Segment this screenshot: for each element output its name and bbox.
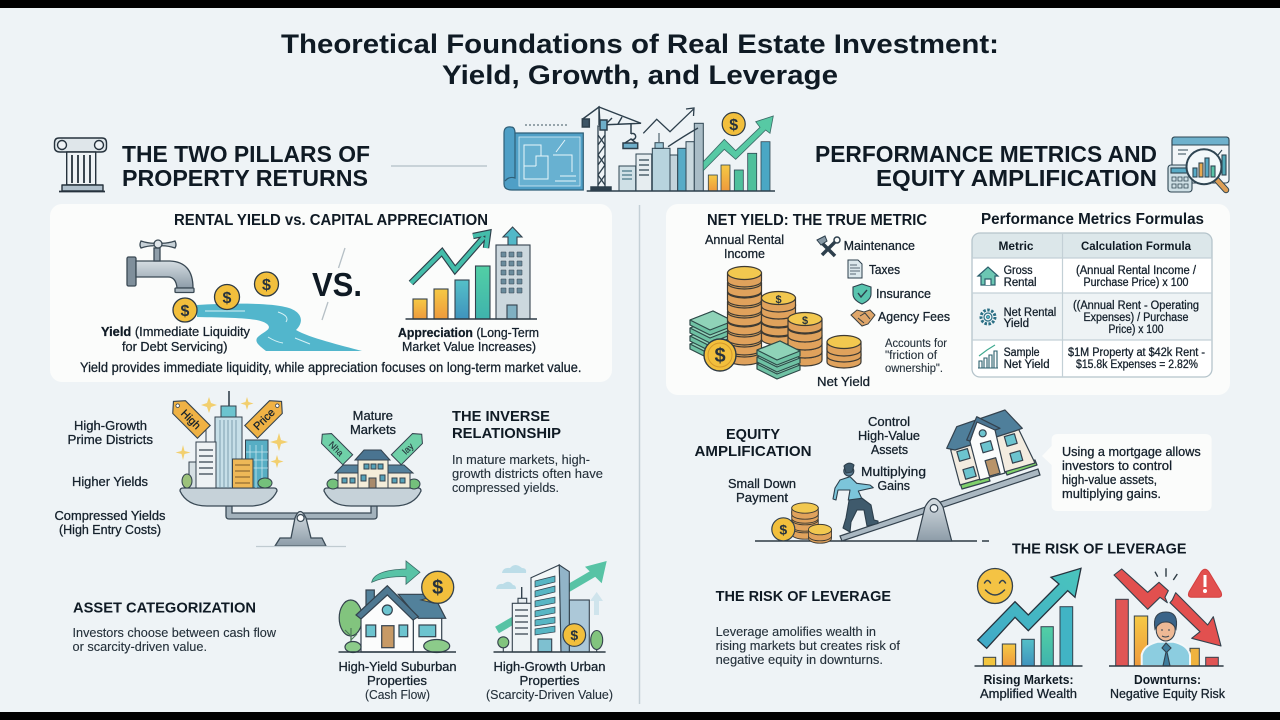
label: control high-value assets: Assets bbox=[871, 443, 908, 457]
label: suburban: Properties bbox=[367, 674, 427, 688]
labels: left of scale bbox=[54, 419, 166, 537]
row: sample net yield: Net Yield bbox=[1004, 359, 1050, 371]
label: multiplying gains bbox=[861, 465, 926, 493]
icon: gear bbox=[981, 310, 995, 324]
note: friction of ownership bbox=[885, 338, 947, 375]
icons: sparkles bbox=[176, 397, 288, 468]
row: sample net yield bbox=[978, 345, 1205, 371]
section: equity amplification bbox=[694, 410, 1212, 543]
icon: curved arrow bbox=[372, 561, 420, 584]
icon: third coin stack: $ bbox=[802, 315, 808, 327]
icon: price tag price bbox=[245, 395, 288, 438]
row: sample net yield: $15.8k Expenses = 2.82% bbox=[1076, 359, 1198, 371]
label: small down payment bbox=[728, 477, 796, 505]
callout: mortgage: Using a mortgage allows bbox=[1062, 445, 1201, 459]
heading: asset categorization: ASSET CATEGORIZATION bbox=[73, 600, 256, 616]
icon: city buildings bbox=[619, 123, 703, 191]
icon: urban coin: $ bbox=[570, 627, 578, 643]
icon: smiley bbox=[978, 568, 1012, 604]
panel: rental yield vs capital appreciation bbox=[50, 204, 612, 382]
label: appreciation bbox=[398, 325, 539, 354]
labels: left of scale: Compressed Yields bbox=[54, 509, 166, 523]
row: gross rental bbox=[978, 265, 1197, 289]
icon: green tag right: lay bbox=[400, 441, 416, 456]
icon: medium coin stack bbox=[762, 292, 796, 345]
section: risk of leverage charts bbox=[974, 540, 1226, 701]
icon: river stream bbox=[197, 304, 362, 351]
label: rising markets: Rising Markets: bbox=[984, 673, 1074, 687]
label: downturns: Negative Equity Risk bbox=[1110, 687, 1226, 701]
heading: two pillars: PROPERTY RETURNS bbox=[122, 165, 368, 191]
text: asset categorization body: or scarcity-driven value. bbox=[72, 640, 207, 654]
table header: Metric bbox=[998, 239, 1034, 253]
chart: downturn bars bbox=[1116, 599, 1218, 666]
icon: third coin stack bbox=[788, 312, 822, 366]
label: mature markets: Mature bbox=[353, 409, 393, 423]
label: rising markets: Amplified Wealth bbox=[980, 687, 1077, 701]
cost: agency fees: Agency Fees bbox=[878, 310, 950, 324]
panel: net yield and formulas bbox=[666, 204, 1230, 395]
label: suburban bbox=[338, 660, 457, 702]
icon: small chart bbox=[978, 345, 998, 368]
icon: tall coin stack bbox=[728, 266, 762, 365]
text: risk body: rising markets but creates risk of bbox=[716, 639, 901, 653]
text: risk body bbox=[716, 625, 901, 667]
icon: price tag price: Price bbox=[251, 407, 278, 433]
row: net rental yield: Yield bbox=[1004, 318, 1029, 330]
label: appreciation: Appreciation (Long-Term bbox=[398, 325, 539, 340]
row: gross rental: Purchase Price) x 100 bbox=[1084, 277, 1188, 289]
icon: coin bubble bbox=[421, 571, 454, 603]
label: urban: Properties bbox=[520, 674, 580, 688]
icon: tilted house bbox=[947, 410, 1037, 489]
title: Theoretical Foundations of Real Estate Investment: bbox=[281, 29, 999, 59]
text: asset categorization body: Investors choose between cash flow bbox=[72, 626, 277, 640]
callout: mortgage: multiplying gains. bbox=[1062, 487, 1161, 501]
icon: green tag left: Nha bbox=[327, 439, 345, 458]
note: friction of ownership: ownership". bbox=[885, 363, 943, 375]
row: gross rental: Rental bbox=[1004, 277, 1037, 289]
icon: seesaw bbox=[755, 469, 1040, 541]
label: yield: Yield (Immediate Liquidity bbox=[101, 324, 250, 339]
label: net yield: Net Yield bbox=[817, 375, 870, 389]
heading: inverse relationship bbox=[452, 408, 561, 442]
label: small down payment: Small Down bbox=[728, 477, 796, 491]
text: risk body: Leverage amolifies wealth in bbox=[716, 625, 876, 639]
cost: taxes: Taxes bbox=[869, 263, 900, 277]
icon: tax document bbox=[848, 260, 862, 278]
text: inverse relationship body bbox=[452, 453, 603, 495]
icon: cash stack front bbox=[757, 341, 800, 379]
icon: appreciation arrow bbox=[411, 233, 488, 283]
heading: risk of leverage upper: THE RISK OF LEVERAGE bbox=[1012, 540, 1186, 558]
icon: coin 2 bbox=[214, 284, 240, 310]
section: inverse relationship bbox=[54, 391, 603, 546]
heading: inverse relationship: RELATIONSHIP bbox=[452, 425, 561, 442]
row: net rental yield: Expenses) / Purchase bbox=[1084, 312, 1188, 324]
icon: tools bbox=[817, 236, 840, 256]
text: asset categorization body bbox=[72, 626, 277, 654]
icon: clouds and faint up arrow bbox=[496, 565, 603, 615]
heading: performance metrics: EQUITY AMPLIFICATION bbox=[876, 165, 1157, 191]
callout: mortgage: investors to control bbox=[1062, 459, 1172, 473]
icon: dollar coin bbox=[722, 112, 745, 136]
label: downturns bbox=[1110, 673, 1226, 701]
label: urban: High-Growth Urban bbox=[494, 660, 606, 674]
icon: worried investor bbox=[1142, 612, 1190, 666]
icon: mansion on scale bbox=[327, 450, 420, 489]
row: net rental yield bbox=[981, 300, 1199, 336]
heading: risk of leverage lower: THE RISK OF LEVERAGE bbox=[716, 588, 891, 605]
icon: dashboard with calculator and magnifier bbox=[1168, 137, 1229, 192]
icon: urban arrow bbox=[497, 561, 607, 630]
icon: suburban house bbox=[339, 586, 450, 652]
icon: handshake bbox=[851, 310, 875, 326]
label: multiplying gains: Gains bbox=[878, 479, 910, 493]
icon: rising arrow bbox=[978, 568, 1081, 648]
cost: maintenance: Maintenance bbox=[844, 239, 915, 253]
section: risk of leverage text bbox=[716, 588, 901, 667]
callout: mortgage: high-value assets, bbox=[1062, 473, 1157, 487]
heading: performance metrics: PERFORMANCE METRICS AND bbox=[815, 141, 1157, 167]
label: urban bbox=[486, 660, 613, 702]
label: annual rental income bbox=[705, 233, 784, 261]
note: friction of ownership: Accounts for bbox=[885, 338, 947, 350]
icon: growth arrow bbox=[703, 116, 773, 171]
icon: thin trend arrows bbox=[643, 108, 698, 147]
heading: rental yield vs appreciation: RENTAL YIELD vs. CAPITAL APPRECIATION bbox=[174, 212, 488, 229]
icon: house bbox=[978, 267, 998, 285]
summary text: Yield provides immediate liquidity, while appreciation focuses on long-term market value. bbox=[80, 360, 582, 375]
label: annual rental income: Annual Rental bbox=[705, 233, 784, 247]
heading: equity amplification: EQUITY bbox=[726, 426, 780, 443]
icon: faucet bbox=[127, 240, 194, 292]
labels: left of scale: (High Entry Costs) bbox=[59, 523, 161, 537]
icon: coin bubble: $ bbox=[432, 577, 443, 599]
row: sample net yield: $1M Property at $42k Rent - bbox=[1068, 347, 1205, 359]
illustration: blueprint, crane, buildings and growth chart bbox=[504, 107, 775, 191]
icon: price tag high: High bbox=[178, 408, 203, 432]
icon: down payment coins: $ bbox=[779, 521, 787, 537]
label: yield: for Debt Servicing) bbox=[122, 339, 228, 354]
icon: small coin stack bbox=[827, 336, 861, 368]
icon: crane bbox=[582, 107, 641, 190]
row: gross rental: Gross bbox=[1004, 265, 1033, 277]
row: gross rental: (Annual Rental Income / bbox=[1076, 265, 1197, 277]
label: small down payment: Payment bbox=[736, 491, 789, 505]
icon: green tag right bbox=[391, 429, 427, 465]
label: mature markets bbox=[350, 409, 396, 437]
icon: urban coin bbox=[563, 624, 586, 646]
label: suburban: High-Yield Suburban bbox=[338, 660, 457, 674]
label: control high-value assets: High-Value bbox=[858, 429, 920, 443]
label: suburban: (Cash Flow) bbox=[365, 688, 430, 702]
text: inverse relationship body: compressed yields. bbox=[452, 481, 559, 495]
table: performance metrics formulas bbox=[972, 233, 1212, 377]
icon: medium coin stack: $ bbox=[775, 294, 782, 306]
heading: net yield: NET YIELD: THE TRUE METRIC bbox=[707, 212, 927, 229]
icon: coin 1 bbox=[173, 298, 197, 322]
icon: green tag left bbox=[317, 429, 353, 465]
labels: left of scale: Prime Districts bbox=[68, 433, 153, 447]
label: multiplying gains: Multiplying bbox=[861, 465, 926, 479]
icon: climbing investor bbox=[833, 463, 878, 532]
icon: coin 2: $ bbox=[223, 290, 232, 307]
heading: equity amplification: AMPLIFICATION bbox=[694, 443, 812, 460]
heading: two pillars bbox=[122, 141, 370, 191]
icon: cash stack left bbox=[690, 311, 733, 359]
table header: Calculation Formula bbox=[1081, 239, 1191, 253]
note: friction of ownership: "friction of bbox=[885, 350, 938, 362]
label: rising markets bbox=[980, 673, 1077, 701]
text: inverse relationship body: In mature markets, high- bbox=[452, 453, 590, 467]
icon: insurance shield bbox=[853, 284, 871, 304]
heading: performance metrics bbox=[815, 141, 1157, 191]
label: vs: VS. bbox=[312, 266, 362, 303]
label: annual rental income: Income bbox=[724, 247, 765, 261]
icon: balance scale bbox=[180, 488, 421, 546]
icon: falling broken arrow bbox=[1114, 569, 1221, 646]
label: mature markets: Markets bbox=[350, 423, 396, 437]
labels: left of scale: Higher Yields bbox=[72, 475, 148, 489]
icon: price tag high bbox=[167, 395, 210, 438]
icon: dollar coin: $ bbox=[729, 117, 738, 134]
label: downturns: Downturns: bbox=[1134, 673, 1201, 687]
label: appreciation: Market Value Increases) bbox=[402, 339, 536, 354]
title: Yield, Growth, and Leverage bbox=[442, 60, 838, 90]
heading: equity amplification bbox=[694, 426, 812, 460]
row: sample net yield: Sample bbox=[1004, 347, 1040, 359]
label: control high-value assets bbox=[858, 415, 920, 457]
icon: big coin: $ bbox=[714, 345, 726, 367]
text: risk body: negative equity in downturns. bbox=[716, 653, 883, 667]
title bbox=[281, 29, 999, 90]
icon: coin 1: $ bbox=[181, 303, 190, 320]
labels: left of scale: High-Growth bbox=[74, 419, 147, 433]
icon: blueprint bbox=[504, 125, 583, 190]
section: asset categorization bbox=[72, 561, 613, 702]
row: net rental yield: ((Annual Rent - Operating bbox=[1073, 300, 1199, 312]
icon: down payment coins bbox=[772, 503, 832, 543]
callout: mortgage bbox=[1042, 434, 1212, 511]
row: net rental yield: Net Rental bbox=[1004, 307, 1056, 319]
icon: city on scale bbox=[182, 391, 272, 488]
icon: burst lines bbox=[1155, 568, 1177, 580]
icon: office building bbox=[496, 227, 530, 319]
table header bbox=[998, 239, 1191, 253]
heading: formulas: Performance Metrics Formulas bbox=[981, 211, 1204, 228]
label: control high-value assets: Control bbox=[868, 415, 910, 429]
icon: coin stacks and cash bbox=[690, 266, 861, 379]
icon: big coin bbox=[704, 339, 736, 371]
icon: urban towers bbox=[498, 565, 603, 652]
chart: rising bars bbox=[708, 142, 770, 191]
label: urban: (Scarcity-Driven Value) bbox=[486, 688, 613, 702]
text: inverse relationship body: growth districts often have bbox=[452, 467, 603, 481]
chart: rising markets bbox=[983, 607, 1073, 666]
chart: appreciation bars bbox=[413, 266, 490, 319]
label: yield bbox=[101, 324, 250, 354]
icon: warning triangle bbox=[1188, 569, 1222, 597]
heading: inverse relationship: THE INVERSE bbox=[452, 408, 550, 425]
heading: two pillars: THE TWO PILLARS OF bbox=[122, 141, 370, 167]
row: net rental yield: Price) x 100 bbox=[1108, 324, 1164, 336]
icon: coin 3: $ bbox=[262, 277, 271, 294]
icon: classical pillar bbox=[54, 138, 106, 192]
icon: coin 3 bbox=[254, 272, 278, 296]
cost: insurance: Insurance bbox=[876, 287, 931, 301]
